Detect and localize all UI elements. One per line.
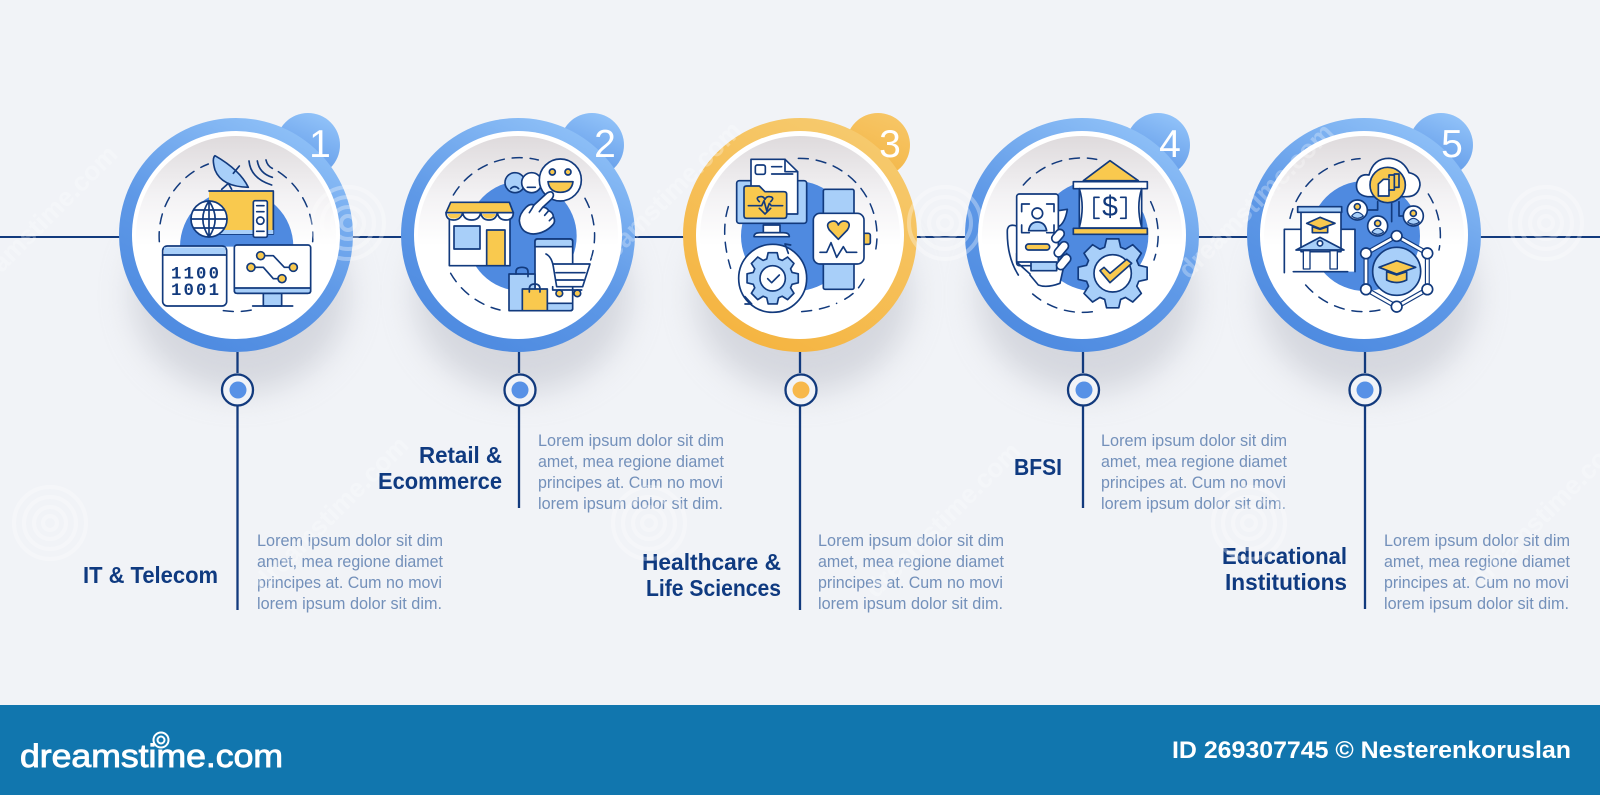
inner disc 4 [978, 131, 1186, 339]
inner disc 1 [132, 131, 340, 339]
icon: retail store, feedback and cart [446, 158, 595, 311]
icon: IT and telecom devices: 1100 [171, 265, 219, 284]
title 3: Healthcare & [642, 549, 781, 575]
badge 2 [560, 113, 624, 177]
watermark overlay [0, 115, 1600, 603]
description 1: Lorem ipsum dolor sit dim [257, 532, 443, 550]
number 1: 1 [309, 123, 331, 166]
shadow 2 [414, 197, 630, 393]
description 2: lorem ipsum dolor sit dim. [538, 495, 723, 513]
inner disc 5 [1260, 131, 1468, 339]
description 2 [538, 432, 724, 513]
description 2: Lorem ipsum dolor sit dim [538, 432, 724, 450]
description 2: principes at. Cum no movi [538, 474, 723, 492]
panel: step 2 Retail & Ecommerce [378, 113, 724, 513]
ring 5 [1247, 118, 1481, 352]
title 3 [642, 549, 781, 601]
logo spiral [154, 732, 168, 748]
title 5 [1222, 543, 1347, 595]
panel: step 3 Healthcare & Life Sciences [642, 113, 1004, 613]
description 4: lorem ipsum dolor sit dim. [1101, 495, 1286, 513]
ring 1 [119, 118, 353, 352]
panel: step 4 BFSI [965, 113, 1287, 513]
description 5 [1384, 532, 1570, 613]
description 3: Lorem ipsum dolor sit dim [818, 532, 1004, 550]
ring 3 [683, 118, 917, 352]
description 3: amet, mea regione diamet [818, 553, 1004, 571]
shadow 4 [978, 197, 1194, 393]
watermark overlay: dreamstime.com [580, 115, 747, 282]
title 5: Institutions [1225, 569, 1347, 595]
badge 1 [276, 113, 340, 177]
badge 5 [1409, 113, 1473, 177]
title 2: Ecommerce [378, 468, 502, 494]
logo text: dreamstime.com [20, 738, 283, 774]
timeline connector line [0, 236, 1600, 238]
description 4: amet, mea regione diamet [1101, 453, 1287, 471]
description 5: Lorem ipsum dolor sit dim [1384, 532, 1570, 550]
stem with node 1 [222, 352, 253, 610]
description 3 [818, 532, 1004, 613]
ring 2 [401, 118, 635, 352]
stem with node 2 [504, 352, 536, 508]
description 5: lorem ipsum dolor sit dim. [1384, 595, 1569, 613]
title 2 [378, 442, 502, 494]
badge 3 [846, 113, 910, 177]
number 5: 5 [1441, 123, 1463, 166]
description 1 [257, 532, 443, 613]
description 1: amet, mea regione diamet [257, 553, 443, 571]
title 2: Retail & [419, 442, 502, 468]
title 4: BFSI [1014, 454, 1062, 480]
icon: IT and telecom devices [159, 156, 313, 312]
watermark overlay: dreamstime.com [859, 436, 1026, 603]
title 3: Life Sciences [646, 575, 781, 601]
icon: bank, verified phone and gear [1007, 158, 1158, 312]
number 4: 4 [1159, 123, 1181, 166]
icon: bank, verified phone and gear: $ [1102, 191, 1118, 223]
number 3: 3 [879, 123, 901, 166]
watermark overlay: dreamstime.com [247, 430, 414, 597]
watermark overlay: dreamstime.com [1172, 117, 1339, 284]
ring 4 [965, 118, 1199, 352]
description 2: amet, mea regione diamet [538, 453, 724, 471]
icon: education network [1284, 158, 1440, 312]
description 4 [1101, 432, 1287, 513]
description 4: Lorem ipsum dolor sit dim [1101, 432, 1287, 450]
description 1: lorem ipsum dolor sit dim. [257, 595, 442, 613]
description 4: principes at. Cum no movi [1101, 474, 1286, 492]
inner disc 2 [414, 131, 622, 339]
inner disc 3 [696, 131, 904, 339]
description 5: amet, mea regione diamet [1384, 553, 1570, 571]
panel: step 5 Educational Institutions [1222, 113, 1570, 613]
description 5: principes at. Cum no movi [1384, 574, 1569, 592]
panel: step 1 IT & Telecom [83, 113, 443, 613]
stem with node 4 [1068, 352, 1099, 508]
icon: IT and telecom devices: 1001 [171, 282, 219, 301]
description 1: principes at. Cum no movi [257, 574, 442, 592]
shadow 1 [132, 197, 348, 393]
number 2: 2 [594, 123, 616, 166]
description 3: principes at. Cum no movi [818, 574, 1003, 592]
shadow 3 [695, 197, 911, 393]
description 3: lorem ipsum dolor sit dim. [818, 595, 1003, 613]
stem with node 5 [1350, 352, 1380, 609]
footer band [0, 705, 1600, 795]
shadow 5 [1260, 197, 1476, 393]
title 5: Educational [1222, 543, 1347, 569]
icon: health records, wearable and gear [725, 158, 877, 312]
title 1: IT & Telecom [83, 562, 218, 588]
image id and author: ID 269307745 © Nesterenkoruslan [1172, 737, 1571, 764]
stem with node 3 [786, 352, 816, 610]
badge 4 [1126, 113, 1190, 177]
